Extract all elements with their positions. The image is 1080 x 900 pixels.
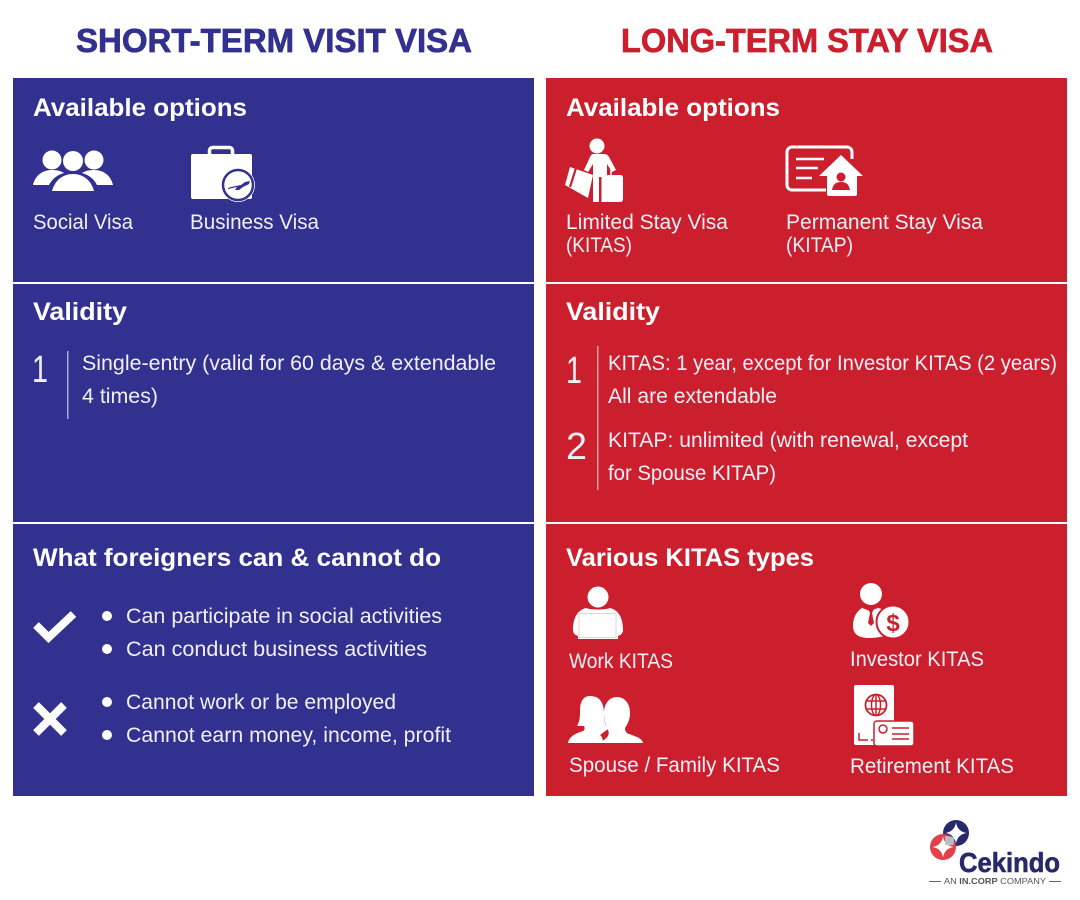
heading: validity: Validity (33, 298, 127, 326)
label: limited stay visa: Limited Stay Visa (566, 211, 728, 234)
logo tagline: AN IN.CORP COMPANY (944, 876, 1046, 886)
panel: short-term validity (13, 284, 534, 522)
icon: work person with laptop (573, 586, 623, 639)
logo: Cekindo (929, 820, 1061, 886)
heading: validity: Validity (566, 298, 660, 326)
title: long-term stay visa: LONG-TERM STAY VISA (621, 22, 993, 59)
label: limited stay visa: (KITAS) (566, 234, 632, 257)
validity text: KITAP (608, 429, 968, 485)
icon: spouse couple (568, 696, 643, 743)
label: investor KITAS: Investor KITAS (850, 648, 984, 671)
number 2: 2 (566, 426, 587, 468)
icon: check mark (36, 614, 74, 638)
validity text: Single-entry (valid for 60 days & extendable (82, 352, 496, 375)
title: short-term visit visa: SHORT-TERM VISIT VISA (76, 22, 472, 59)
list: cannot do: Cannot work or be employed (126, 691, 396, 714)
validity text: KITAS: KITAS: 1 year, except for Investor KITAS (2 years) (608, 352, 1057, 375)
icon: traveller with luggage (565, 138, 623, 202)
validity text (82, 352, 496, 408)
panel: long-term available options (546, 78, 1067, 282)
list: can do: Can participate in social activities (126, 605, 442, 628)
validity text: KITAP: for Spouse KITAP) (608, 462, 776, 485)
validity text: 4 times) (82, 385, 158, 408)
icon: passport and ID card (854, 685, 914, 746)
number 1: 1 (566, 350, 582, 392)
panel: short-term available options (13, 78, 534, 282)
label: limited stay visa (566, 211, 728, 257)
label: work KITAS: Work KITAS (569, 650, 673, 673)
list: cannot do (102, 691, 451, 747)
list: can do: Can conduct business activities (126, 638, 427, 661)
panel: various KITAS types (546, 524, 1067, 796)
heading: what foreigners can and cannot do: What foreigners can & cannot do (33, 544, 441, 572)
number 1: 1 (32, 349, 48, 391)
label: business visa: Business Visa (190, 211, 319, 234)
list: cannot do: Cannot earn money, income, profit (126, 724, 451, 747)
heading: available options: Available options (566, 94, 780, 122)
icon: group of people (33, 150, 113, 191)
panel: what foreigners can and cannot do (13, 524, 534, 796)
logo wordmark: Cekindo (959, 847, 1060, 878)
label: spouse / family KITAS: Spouse / Family KITAS (569, 754, 780, 777)
icon: permit card with house (787, 147, 863, 196)
icon: investor with dollar: $ (886, 610, 900, 637)
icon: briefcase with plane (191, 148, 255, 202)
label: permanent stay visa: Permanent Stay Visa (786, 211, 983, 234)
label: permanent stay visa: (KITAP) (786, 234, 853, 257)
validity text: KITAS: All are extendable (608, 385, 777, 408)
logo mark (930, 820, 969, 860)
label: social visa: Social Visa (33, 211, 133, 234)
label: permanent stay visa (786, 211, 983, 257)
icon: cross mark (36, 705, 64, 733)
list: can do (102, 605, 442, 661)
label: retirement KITAS: Retirement KITAS (850, 755, 1014, 778)
icon: investor with dollar (853, 583, 910, 638)
heading: available options: Available options (33, 94, 247, 122)
validity text: KITAS (608, 352, 1057, 408)
heading: various KITAS types: Various KITAS types (566, 544, 814, 572)
panel: long-term validity (546, 284, 1067, 522)
validity text: KITAP: KITAP: unlimited (with renewal, except (608, 429, 968, 452)
